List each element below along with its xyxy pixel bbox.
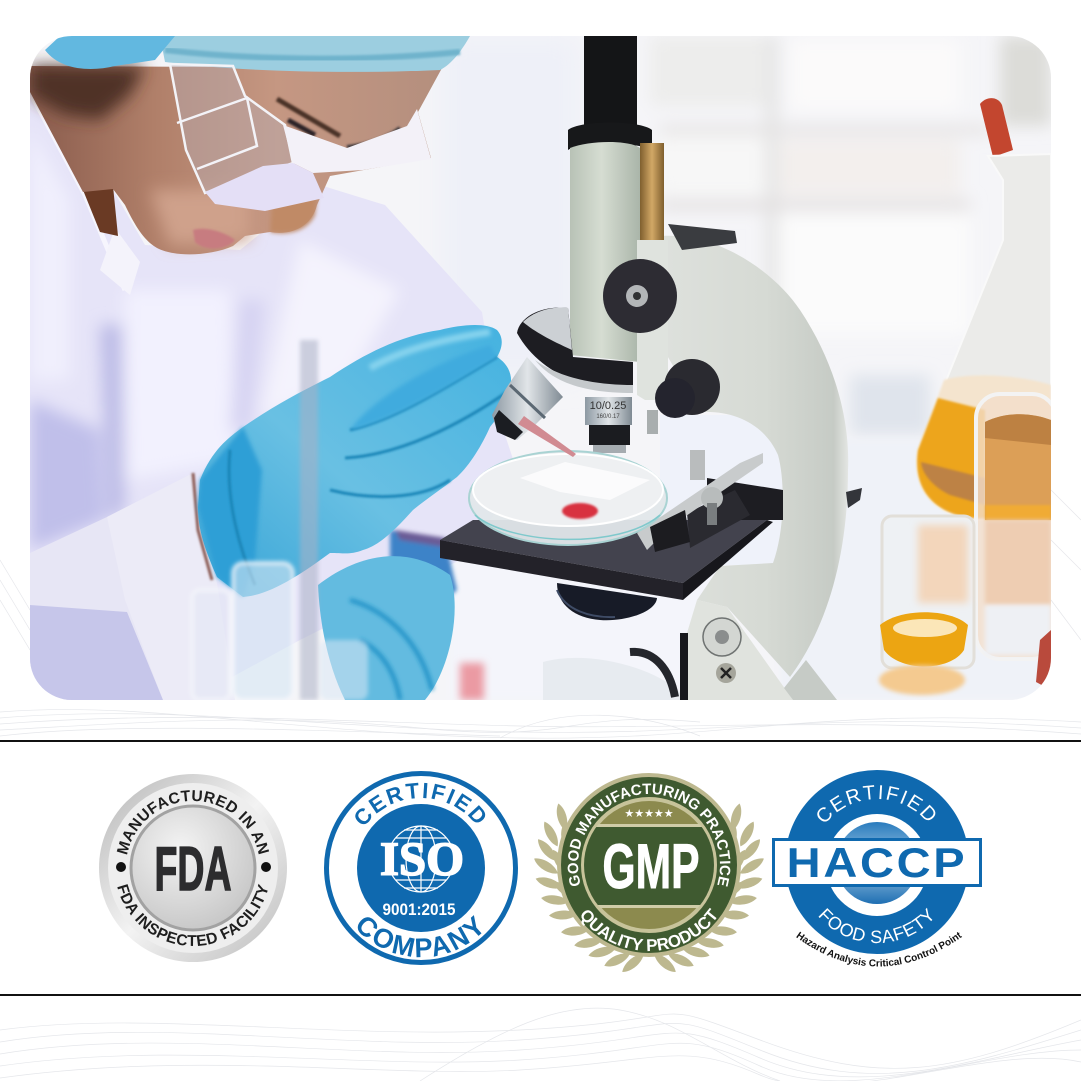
mechanical stage bbox=[637, 450, 862, 552]
tall beaker bbox=[976, 394, 1056, 659]
pipette tip bbox=[518, 416, 576, 457]
badge: HACCP bbox=[772, 770, 982, 966]
condenser bbox=[557, 583, 657, 620]
GMP stars: ★★★★★ bbox=[624, 807, 674, 820]
face and neck bbox=[30, 66, 442, 254]
flask liquid bbox=[917, 375, 1051, 520]
objective lens: right bbox=[585, 397, 632, 453]
blue gloved hand bbox=[198, 325, 511, 597]
objective lens: left bbox=[492, 357, 563, 440]
microscope arm bbox=[664, 236, 848, 677]
brass rack bbox=[640, 143, 664, 240]
laboratory flasks bbox=[879, 98, 1056, 695]
GMP wordmark: GMP bbox=[602, 832, 700, 902]
red object at right edge bbox=[1036, 630, 1051, 690]
surgical cap bbox=[45, 36, 470, 72]
FDA ring text: FDA INSPECTED FACILITY bbox=[117, 884, 268, 946]
petri dish with sample bbox=[469, 451, 667, 545]
microscope base disc bbox=[543, 658, 680, 700]
microscope body bbox=[570, 142, 640, 362]
HACCP banner bbox=[774, 840, 980, 886]
nosepiece bbox=[517, 307, 633, 393]
FDA ring text: MANUFACTURED IN AN bbox=[116, 790, 270, 854]
coarse focus knob bbox=[603, 259, 677, 333]
ISO ring text bbox=[355, 782, 486, 958]
ISO ring text: CERTIFIED bbox=[355, 782, 486, 824]
GMP ring text: GOOD MANUFACTURING PRACTICE bbox=[568, 784, 730, 887]
HACCP wordmark: HACCP bbox=[787, 840, 967, 886]
lower blue glove bbox=[318, 556, 455, 700]
safety goggles bbox=[170, 64, 431, 211]
objective lens: right: 160/0.17 bbox=[596, 414, 620, 420]
red pipette bulb bbox=[980, 98, 1013, 157]
HACCP ring text bbox=[817, 785, 936, 944]
icon: globe bbox=[388, 826, 454, 892]
photo backdrop: bright lab window bbox=[30, 36, 1051, 700]
lower sleeve behind hand bbox=[390, 530, 457, 600]
stage bbox=[440, 520, 773, 600]
ISO ring text: COMPANY bbox=[358, 915, 482, 958]
lab coat bbox=[30, 98, 512, 643]
small beaker bbox=[879, 516, 974, 695]
arm screws bbox=[703, 618, 741, 683]
base handle bbox=[630, 652, 675, 697]
divider: upper rule bbox=[0, 740, 1081, 742]
badge: GMP bbox=[534, 773, 764, 972]
arm base and struts bbox=[680, 600, 837, 700]
badge: FDA bbox=[99, 774, 287, 962]
eyepiece tube bbox=[568, 36, 652, 150]
microscope bbox=[440, 36, 862, 700]
objective lens: right: 10/0.25 bbox=[590, 400, 626, 412]
FDA ring text bbox=[116, 790, 270, 946]
background: wave pattern bbox=[0, 490, 1081, 1081]
foreground test tubes and pole bbox=[218, 338, 370, 700]
focus block bbox=[637, 240, 668, 400]
divider: lower rule bbox=[0, 994, 1081, 996]
photo: scientist at microscope bbox=[30, 36, 1056, 700]
GMP ring text: QUALITY PRODUCT bbox=[581, 908, 716, 952]
ISO standard number: 9001:2015 bbox=[382, 900, 456, 919]
ISO wordmark: ISO bbox=[380, 833, 464, 886]
badge: ISO bbox=[324, 771, 518, 965]
fine focus knob bbox=[647, 359, 720, 434]
laurel wreath bbox=[532, 802, 766, 975]
HACCP ring text: CERTIFIED bbox=[817, 785, 936, 822]
HACCP subtitle: Hazard Analysis Critical Control Point bbox=[796, 932, 962, 966]
flask glass bbox=[948, 154, 1050, 514]
arm top bracket bbox=[668, 224, 737, 250]
HACCP ring text: FOOD SAFETY bbox=[818, 908, 932, 944]
lab coat sleeve and cuff bbox=[30, 473, 235, 700]
lips bbox=[193, 229, 235, 249]
GMP ring text bbox=[568, 784, 730, 952]
FDA wordmark: FDA bbox=[154, 835, 232, 904]
